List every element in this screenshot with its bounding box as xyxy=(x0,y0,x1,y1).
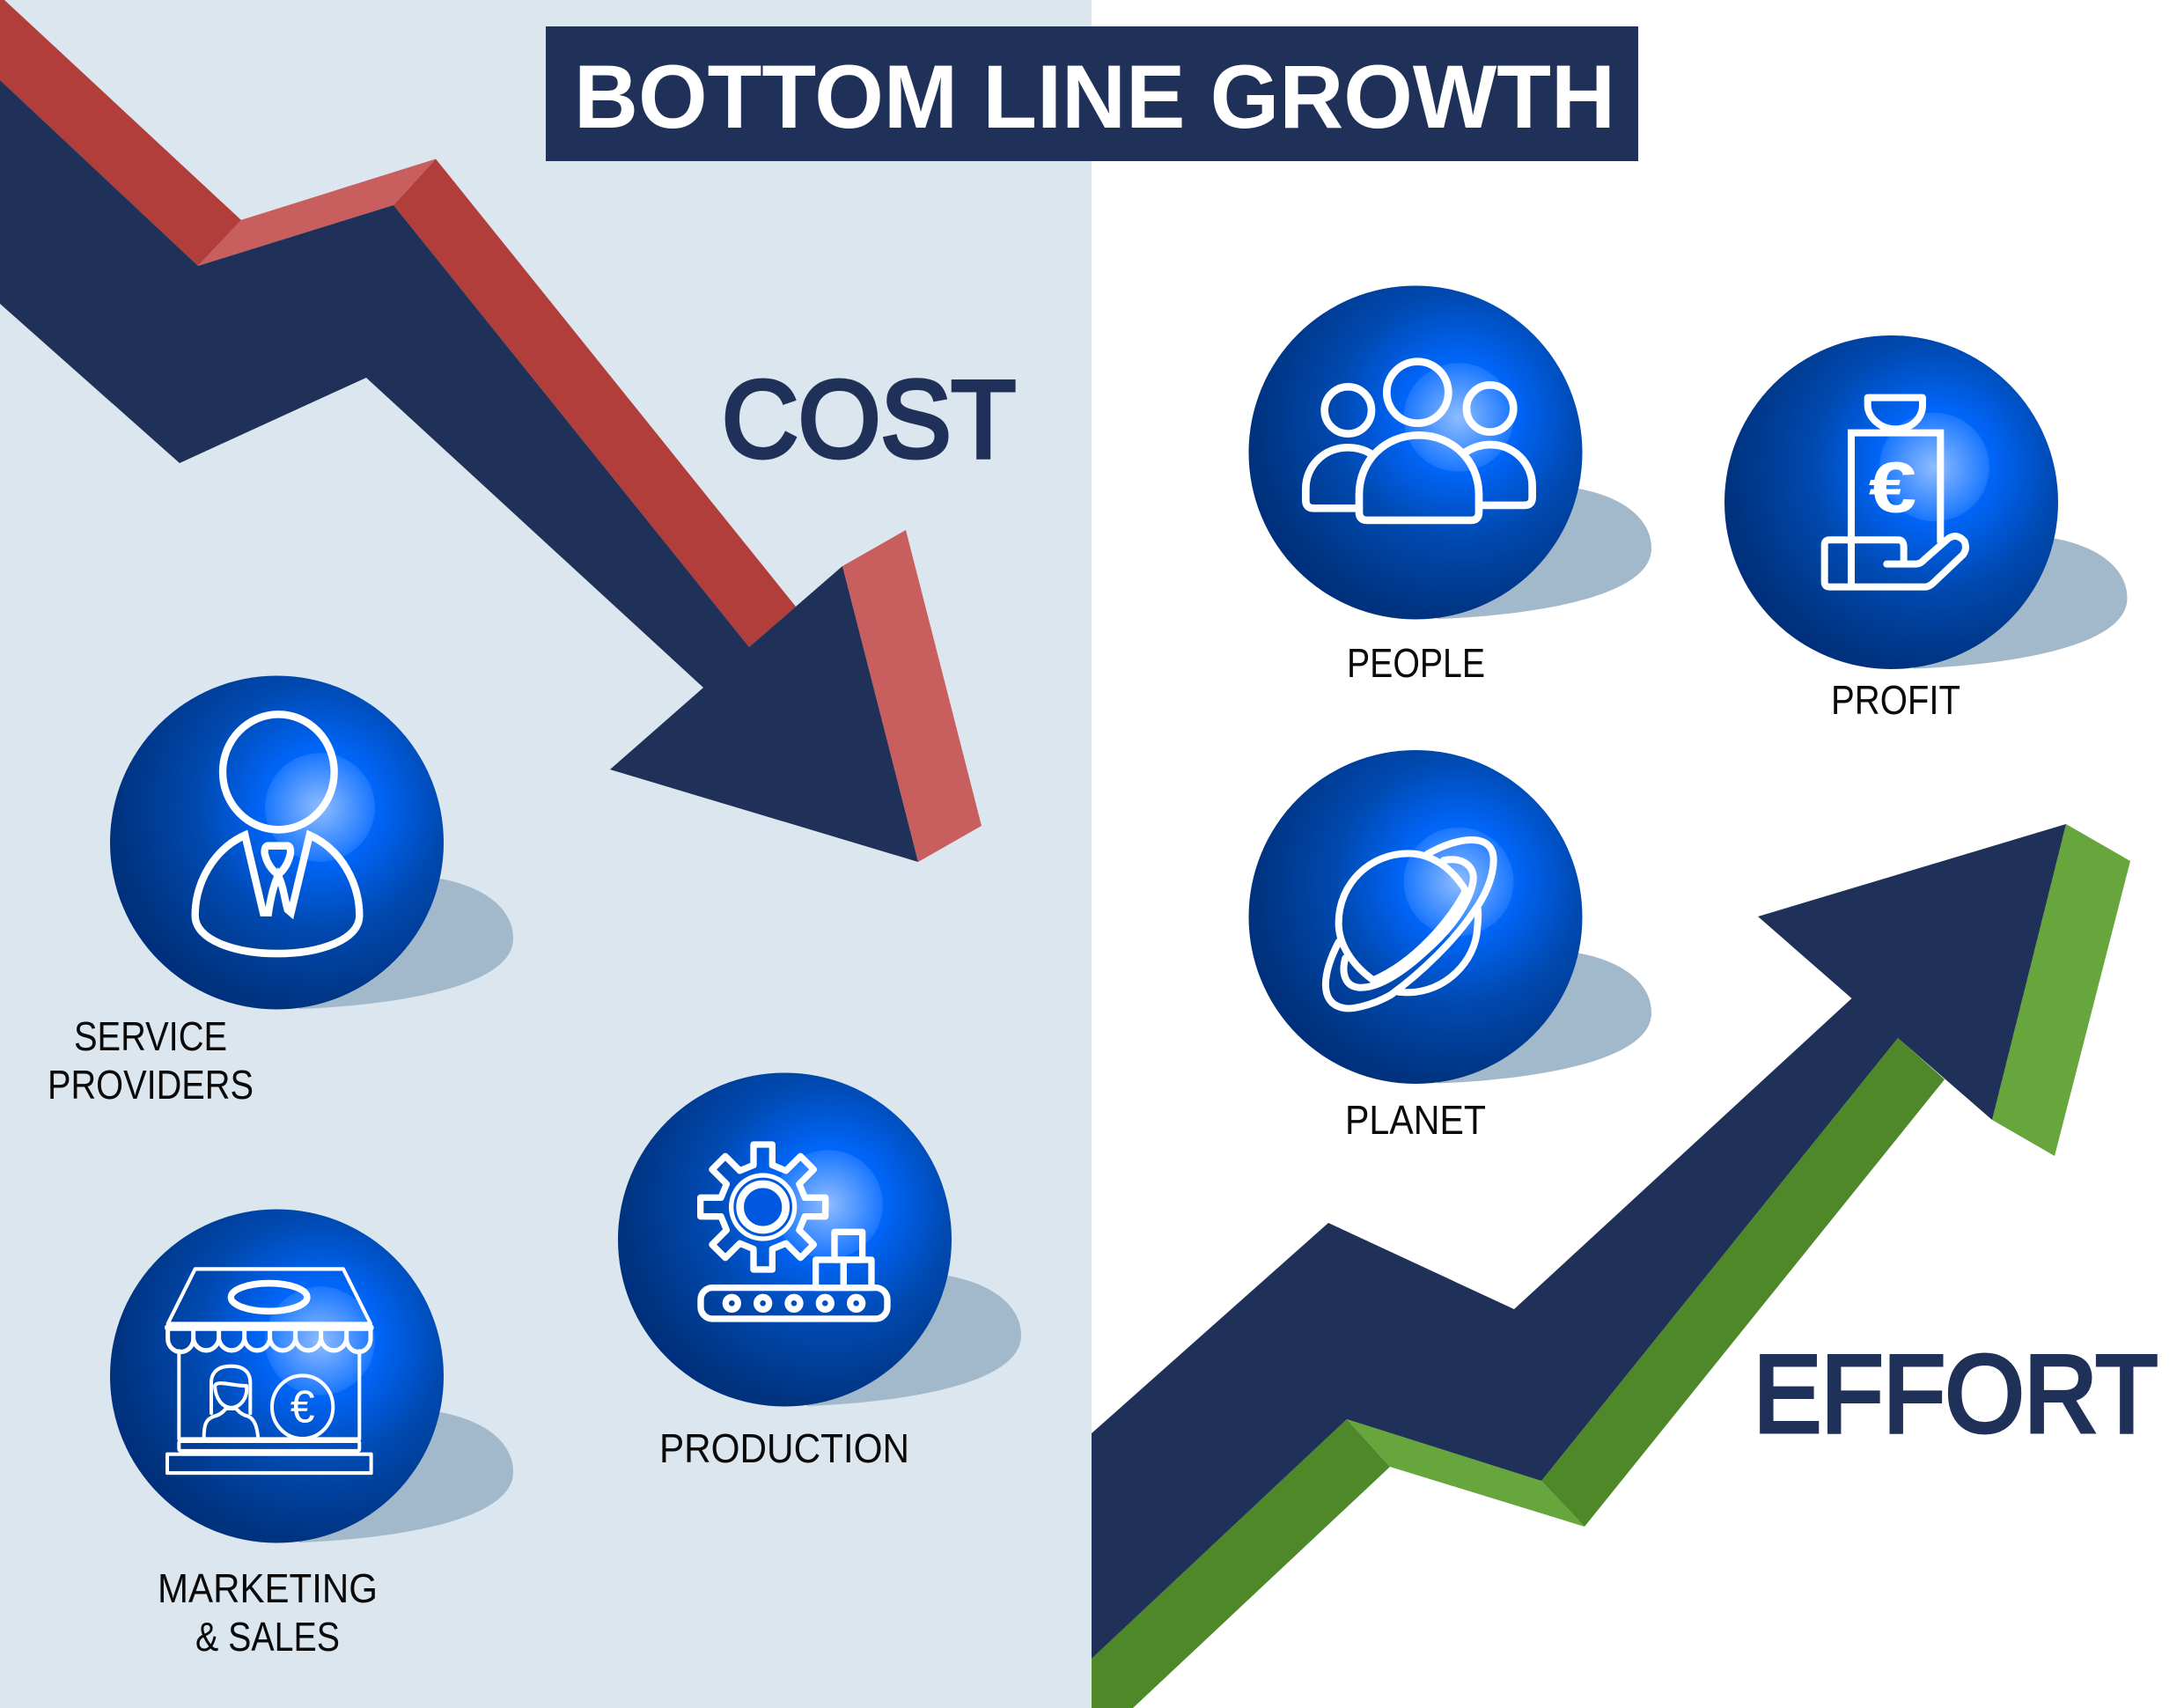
item: marketing and sales xyxy=(110,1210,513,1660)
label: marketing and sales: & SALES xyxy=(195,1614,340,1660)
item: planet xyxy=(1248,750,1651,1143)
heading: effort: EFFORT xyxy=(1754,1334,2158,1455)
item: people xyxy=(1248,285,1651,686)
arrow: falling cost xyxy=(0,0,982,862)
heading: cost: COST xyxy=(722,359,1016,481)
arrow: rising effort xyxy=(1092,824,2130,1708)
title banner: BOTTOM LINE GROWTH xyxy=(574,47,1615,147)
icon: group of people xyxy=(1305,362,1533,520)
label: marketing and sales: MARKETING xyxy=(158,1565,378,1611)
label: production: PRODUCTION xyxy=(659,1425,909,1471)
icon: hand holding money xyxy=(1825,398,1966,587)
item: production xyxy=(618,1072,1021,1471)
icon: business person xyxy=(195,714,359,953)
label: planet: PLANET xyxy=(1345,1097,1486,1143)
icon: shop xyxy=(167,1269,371,1473)
panel: cost background xyxy=(0,0,1092,1708)
label: service providers: SERVICE xyxy=(74,1013,227,1059)
item: profit xyxy=(1724,335,2127,723)
icon: hand holding money: € xyxy=(1869,447,1916,528)
icon: gear and conveyor xyxy=(701,1145,887,1319)
label: service providers: PROVIDERS xyxy=(48,1062,254,1108)
icon: ringed planet xyxy=(1326,840,1494,1008)
label: profit: PROFIT xyxy=(1831,677,1960,723)
item: service providers xyxy=(48,676,513,1108)
icon: shop: € xyxy=(290,1381,315,1432)
label: people: PEOPLE xyxy=(1347,640,1485,686)
